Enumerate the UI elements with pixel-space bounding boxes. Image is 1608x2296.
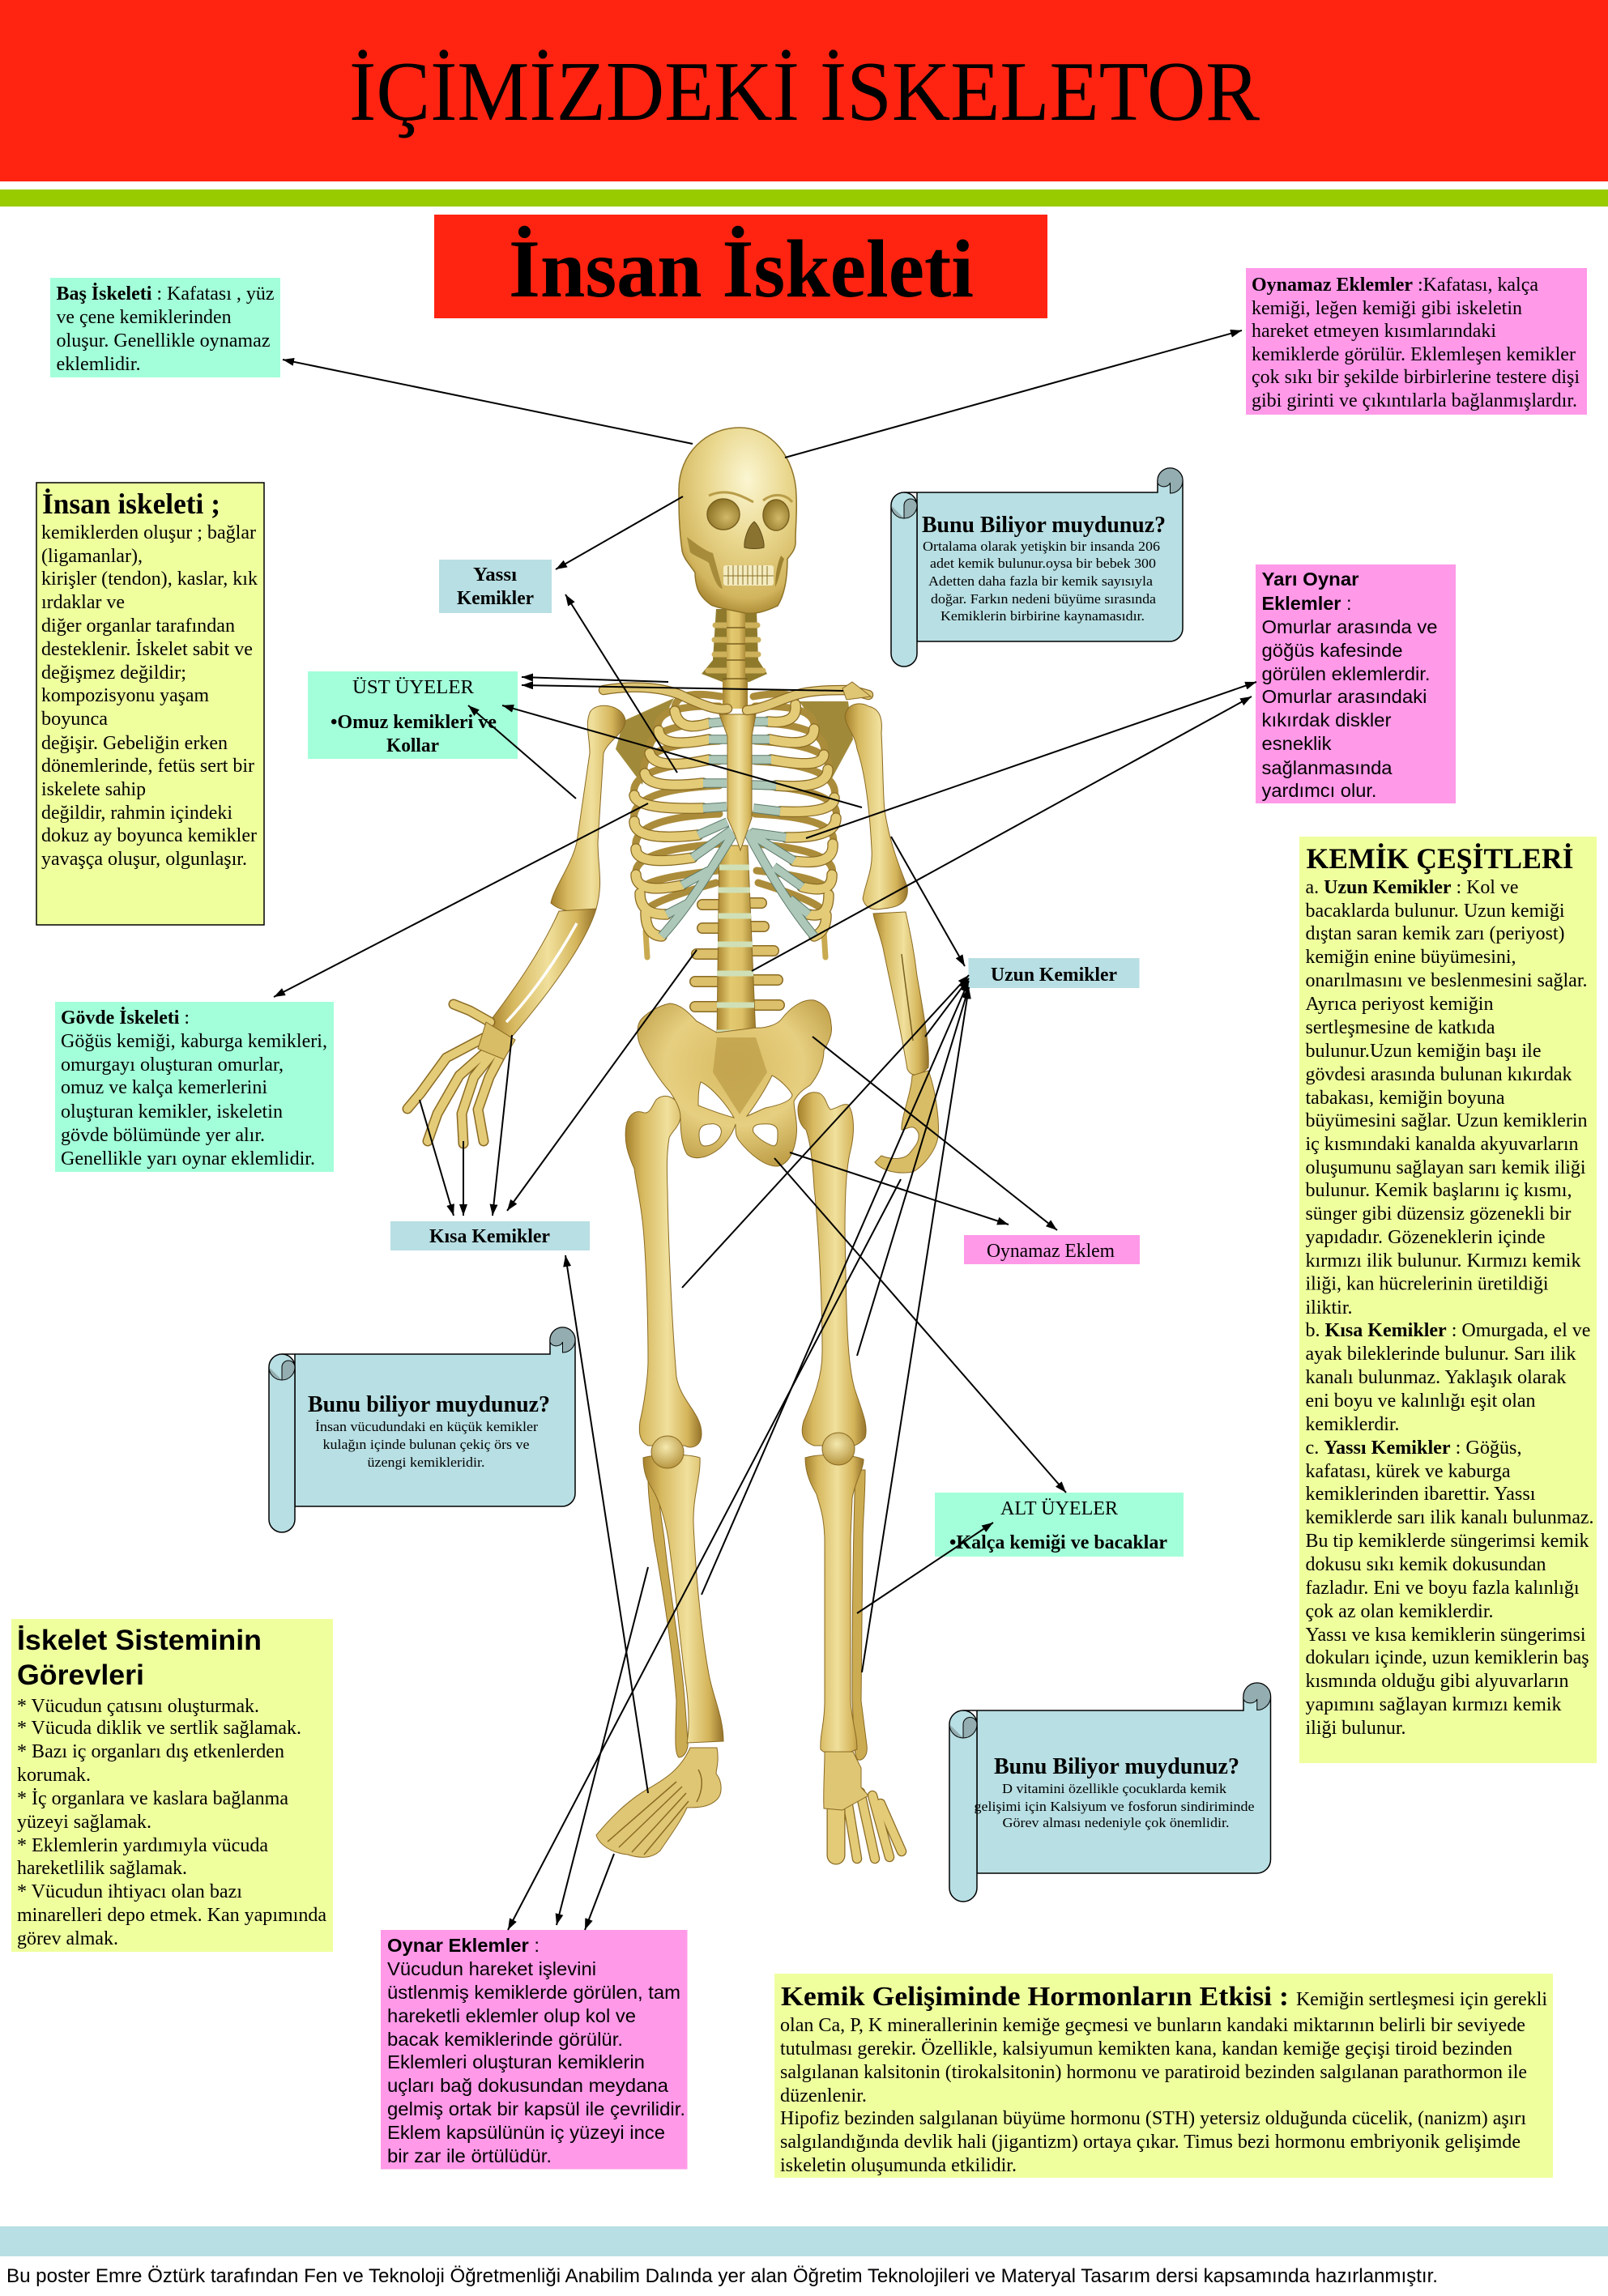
heading: Kemik Gelişiminde Hormonların Etkisi : bbox=[781, 1982, 1289, 2012]
label: oynamaz eklem bbox=[964, 1235, 1140, 1264]
skull bbox=[679, 428, 796, 613]
panel: gövde iskeleti: oluşturan kemikler, iskeletin bbox=[61, 1101, 283, 1122]
panel: bilgi kutusu 1 scroll: Ortalama olarak yetişkin bir insanda 206 bbox=[923, 539, 1160, 554]
panel: kemik çeşitleri: iliği, kan hücrelerinin üretildiği bbox=[1306, 1273, 1549, 1294]
left femur bbox=[625, 1096, 702, 1447]
panel: insan iskeleti: yavaşça oluşur, olgunlaşır. bbox=[41, 849, 247, 870]
panel: oynamaz eklemler: kemiği, leğen kemiği gibi iskeletin bbox=[1252, 298, 1522, 319]
panel: insan iskeleti: desteklenir. İskelet sabit ve bbox=[41, 639, 253, 660]
panel: kemik çeşitleri: dokusu sıkı kemik dokusundan bbox=[1306, 1554, 1546, 1575]
panel: bilgi kutusu 1 scroll: adet kemik bulunur.oysa bir bebek 300 bbox=[930, 556, 1156, 571]
panel: kemik çeşitleri: büyümesini sağlar. Uzun kemiklerin bbox=[1306, 1110, 1588, 1131]
arrow: foot to oynar eklemler bbox=[585, 1854, 614, 1930]
heading: İskelet Sisteminin bbox=[17, 1625, 262, 1656]
panel: gövde iskeleti: gövde bölümünde yer alır. bbox=[61, 1125, 265, 1146]
panel: gövde iskeleti: omuz ve kalça kemerlerini bbox=[61, 1077, 267, 1098]
green divider band bbox=[0, 190, 1608, 207]
panel: yarı oynar eklemler: Omurlar arasında ve bbox=[1262, 616, 1437, 637]
panel: kemik gelişiminde hormonların etkisi: düzenlenir. bbox=[780, 2085, 867, 2106]
right lower leg bbox=[805, 1433, 867, 1760]
arrow: fibula to alt üyeler bbox=[857, 1523, 993, 1613]
panel: kemik çeşitleri: Yassı ve kısa kemiklerin süngerimsi bbox=[1306, 1625, 1586, 1646]
panel: bilgi kutusu 1 scroll bbox=[891, 468, 1183, 667]
panel: insan iskeleti: (ligamanlar), bbox=[41, 546, 143, 567]
panel: oynamaz eklemler: hareket etmeyen kısımlarındaki bbox=[1252, 321, 1496, 342]
panel: insan iskeleti: kirişler (tendon), kaslar, kık bbox=[41, 569, 258, 590]
panel: bilgi kutusu 3 scroll: Bunu Biliyor muydunuz? bbox=[994, 1754, 1239, 1779]
panel: bilgi kutusu 3 scroll: D vitamini özellikle çocuklarda kemik bbox=[1002, 1781, 1227, 1796]
panel: insan iskeleti: ırdaklar ve bbox=[41, 592, 125, 613]
panel: kemik çeşitleri: iliği bulunur. bbox=[1306, 1718, 1406, 1739]
right arm bbox=[845, 704, 928, 1075]
panel: bilgi kutusu 3 scroll: gelişimi için Kalsiyum ve fosforun sindiriminde bbox=[974, 1799, 1254, 1814]
panel: yarı oynar eklemler: esneklik bbox=[1262, 733, 1332, 754]
panel: bilgi kutusu 2 scroll: kulağın içinde bulunan çekiç örs ve bbox=[322, 1437, 530, 1452]
label: alt üyeler: •Kalça kemiği ve bacaklar bbox=[949, 1532, 1167, 1553]
panel: baş iskeleti: Baş İskeleti : Kafatası , yüz bbox=[57, 283, 274, 305]
left foot bbox=[596, 1748, 721, 1857]
panel: oynamaz eklemler: kemiklerde görülür. Eklemleşen kemikler bbox=[1252, 344, 1576, 365]
arrow: forearm to uzun kemikler bbox=[925, 978, 969, 1037]
panel: bilgi kutusu 1 scroll: Bunu Biliyor muydunuz? bbox=[922, 513, 1166, 538]
skeleton illustration bbox=[407, 428, 938, 1859]
label: oynamaz eklem: Oynamaz Eklem bbox=[987, 1241, 1115, 1262]
footer credit: Bu poster Emre Öztürk tarafından Fen ve Teknoloji Öğretmenliği Anabilim Dalında yer alan Öğretim Teknolojileri ve Materyal Tasarım dersi kapsamında hazırlanmıştır. bbox=[6, 2265, 1438, 2287]
panel: insan iskeleti: boyunca bbox=[41, 709, 108, 730]
panel: kemik gelişiminde hormonların etkisi: Kemiğin sertleşmesi için gerekli bbox=[1296, 1989, 1547, 2010]
subtitle: İnsan İskeleti bbox=[509, 224, 974, 315]
right foot bbox=[824, 1752, 902, 1859]
panel: kemik çeşitleri: kemiklerinden ibarettir. Yassı bbox=[1306, 1484, 1536, 1505]
panel: iskelet sisteminin görevleri: hareketlilik sağlamak. bbox=[17, 1858, 187, 1879]
arrow: right clavicle to üst üyeler bbox=[522, 685, 843, 691]
lumbar spine bbox=[695, 846, 779, 1037]
panel: insan iskeleti: iskelete sahip bbox=[41, 779, 146, 800]
right hand bbox=[875, 1071, 938, 1173]
panel: kemik çeşitleri: c. Yassı Kemikler : Göğüs, bbox=[1306, 1438, 1521, 1459]
panel: iskelet sisteminin görevleri: * Vücudun çatısını oluşturmak. bbox=[17, 1696, 259, 1717]
arrow: humerus to uzun kemikler bbox=[891, 837, 965, 966]
panel: bilgi kutusu 1 scroll: Kemiklerin birbirine kaynamasıdır. bbox=[940, 608, 1145, 624]
arrow: shin to oynar eklemler bbox=[557, 1567, 648, 1925]
panel: kemik gelişiminde hormonların etkisi: olan Ca, P, K minerallerinin kemiğe geçmesi ve bunların kandaki miktarının belirli bir seviyede bbox=[780, 2015, 1525, 2036]
panel: yarı oynar eklemler: yardımcı olur. bbox=[1262, 780, 1377, 801]
arrow: hand to oynar eklemler bbox=[508, 1179, 901, 1930]
arrow: wrist to kısa kemikler bbox=[493, 1035, 512, 1216]
panel: bilgi kutusu 3 scroll: Görev alması nedeniyle çok önemlidir. bbox=[1003, 1815, 1230, 1830]
panel: gövde iskeleti: Göğüs kemiği, kaburga kemikleri, bbox=[61, 1031, 327, 1052]
panel: oynar eklemler: uçları bağ dokusundan meydana bbox=[387, 2075, 668, 2096]
panel: kemik çeşitleri: kısmında olduğu gibi alyuvarların bbox=[1306, 1671, 1568, 1692]
panel: insan iskeleti: kompozisyonu yaşam bbox=[41, 685, 209, 706]
panel: kemik çeşitleri: ayak bileklerinde bulunur. Sarı ilik bbox=[1306, 1344, 1576, 1365]
panel: insan iskeleti: diğer organlar tarafından bbox=[41, 616, 235, 637]
title banner bbox=[0, 0, 1608, 181]
panel: kemik çeşitleri: kırmızı ilik bulunur. Kırmızı kemik bbox=[1306, 1250, 1581, 1272]
panel: oynar eklemler: üstlenmiş kemiklerde görülen, tam bbox=[387, 1982, 680, 2003]
panel: kemik çeşitleri: bulunur. Kemik başlarını iç kısmı, bbox=[1306, 1180, 1572, 1201]
arrow: spine to yarı oynar bbox=[752, 696, 1252, 971]
panel: oynar eklemler: Oynar Eklemler : bbox=[387, 1935, 540, 1956]
panel: bilgi kutusu 2 scroll bbox=[269, 1327, 575, 1532]
panel: kemik çeşitleri: Bu tip kemiklerde süngerimsi kemik bbox=[1306, 1531, 1589, 1552]
arrow: finger 2 to kısa kemikler bbox=[463, 1141, 464, 1216]
panel: kemik çeşitleri: onarılmasını ve beslenmesini sağlar. bbox=[1306, 970, 1588, 991]
panel: gövde iskeleti: Gövde İskeleti : bbox=[61, 1007, 190, 1029]
label: alt üyeler: ALT ÜYELER bbox=[1000, 1498, 1118, 1519]
panel: kemik çeşitleri: iliktir. bbox=[1306, 1297, 1353, 1318]
arrow: skull to yassı kemikler bbox=[556, 496, 683, 569]
panel: kemik çeşitleri: yapıdadır. Gözeneklerin içinde bbox=[1306, 1227, 1546, 1248]
panel: insan iskeleti: dönemlerinde, fetüs sert bir bbox=[41, 756, 254, 777]
label: yassı kemikler bbox=[439, 560, 552, 613]
panel: kemik gelişiminde hormonların etkisi: salgılanan kalsitonin (tirokalsitonin) hormonu ve paratiroid bezinden salgılanan parathormon ile bbox=[780, 2062, 1527, 2083]
panel: kemik gelişiminde hormonların etkisi: Hipofiz bezinden salgılanan büyüme hormonu (STH) yetersiz olduğunda cücelik, (nanizm) aşırı bbox=[780, 2108, 1526, 2129]
arrow: ribs to gövde iskeleti bbox=[274, 803, 648, 997]
panel: baş iskeleti bbox=[50, 278, 280, 377]
heading: KEMİK ÇEŞİTLERİ bbox=[1306, 842, 1573, 875]
neck vertebrae bbox=[702, 607, 767, 709]
panel: insan iskeleti: değişmez değildir; bbox=[41, 662, 186, 684]
panel: kemik çeşitleri bbox=[1299, 837, 1597, 1763]
panel: oynamaz eklemler: Oynamaz Eklemler :Kafatası, kalça bbox=[1252, 275, 1538, 296]
panel: yarı oynar eklemler: Omurlar arasındaki bbox=[1262, 686, 1427, 707]
panel: iskelet sisteminin görevleri: * Vücudun ihtiyacı olan bazı bbox=[17, 1881, 242, 1902]
panel: kemik çeşitleri: çok az olan kemiklerdir. bbox=[1306, 1601, 1494, 1622]
panel: kemik gelişiminde hormonların etkisi: salgılandığında devlik hali (jigantizm) ortaya çıkar. Timus bezi hormonu embriyonik gelişimde bbox=[780, 2132, 1521, 2153]
panel: oynamaz eklemler bbox=[1246, 268, 1587, 415]
label: üst üyeler: •Omuz kemikleri ve bbox=[331, 712, 497, 733]
panel: iskelet sisteminin görevleri: * Eklemlerin yardımıyla vücuda bbox=[17, 1835, 268, 1856]
clavicles bbox=[604, 682, 871, 710]
panel: oynar eklemler: bacak kemiklerinde görülür. bbox=[387, 2029, 623, 2050]
panel: oynar eklemler: Vücudun hareket işlevini bbox=[387, 1958, 596, 1979]
back ribs bbox=[633, 694, 837, 957]
label: yassı kemikler: Kemikler bbox=[457, 588, 534, 609]
arrow: pelvis to alt üyeler bbox=[774, 1158, 1066, 1493]
arrow: right femur to uzun kemikler bbox=[857, 987, 969, 1356]
panel: kemik çeşitleri: a. Uzun Kemikler : Kol ve bbox=[1306, 877, 1518, 898]
panel: insan iskeleti: değildir, rahmin içindeki bbox=[41, 803, 232, 824]
panel: iskelet sisteminin görevleri: Görevleri bbox=[17, 1659, 144, 1691]
arrow: skull to baş iskeleti bbox=[283, 360, 693, 444]
panel: kemik çeşitleri: yapımını sağlayan kırmızı kemik bbox=[1306, 1694, 1562, 1715]
panel: kemik çeşitleri: gövdesi arasında bulunan kıkırdak bbox=[1306, 1064, 1572, 1085]
panel: gövde iskeleti: omurgayı oluşturan omurlar, bbox=[61, 1054, 284, 1076]
panel: kemik çeşitleri: kemiklerdir. bbox=[1306, 1414, 1400, 1435]
subtitle panel bbox=[434, 215, 1047, 318]
panel: kemik çeşitleri: tabakası, kemiğin boyuna bbox=[1306, 1088, 1505, 1109]
right femur bbox=[798, 1093, 866, 1446]
pelvis bbox=[638, 1000, 832, 1166]
footer band bbox=[0, 2226, 1608, 2256]
panel: insan iskeleti: dokuz ay boyunca kemikler bbox=[41, 825, 257, 846]
panel: kemik çeşitleri: Ayrıca periyost kemiğin bbox=[1306, 994, 1494, 1015]
panel: bilgi kutusu 1 scroll: doğar. Farkın nedeni büyüme sırasında bbox=[931, 591, 1156, 607]
panel: iskelet sisteminin görevleri: görev almak. bbox=[17, 1928, 118, 1949]
sternum bbox=[719, 714, 756, 850]
panel: baş iskeleti: oluşur. Genellikle oynamaz bbox=[57, 330, 271, 351]
panel: insan iskeleti: kemiklerden oluşur ; bağlar bbox=[41, 522, 256, 543]
heading: İnsan iskeleti ; bbox=[42, 488, 220, 520]
panel: kemik çeşitleri: bulunur.Uzun kemiğin başı ile bbox=[1306, 1041, 1541, 1062]
panel: bilgi kutusu 3 scroll bbox=[949, 1683, 1270, 1902]
panel: gövde iskeleti: Genellikle yarı oynar eklemlidir. bbox=[61, 1148, 315, 1169]
label: üst üyeler bbox=[308, 671, 518, 759]
arrow: right humerus to üst üyeler bbox=[502, 705, 862, 807]
front ribs and cartilage bbox=[634, 705, 836, 936]
label: üst üyeler: ÜST ÜYELER bbox=[352, 677, 474, 698]
panel: yarı oynar eklemler: Yarı Oynar bbox=[1262, 569, 1359, 590]
panel: oynar eklemler: gelmiş ortak bir kapsül ile çevrilidir. bbox=[387, 2098, 685, 2119]
panel: kemik çeşitleri: bacaklarda bulunur. Uzun kemiği bbox=[1306, 901, 1565, 922]
arrow: left femur to uzun kemikler bbox=[682, 975, 969, 1288]
label: alt üyeler bbox=[935, 1493, 1184, 1557]
arrow: foot to kısa kemikler bbox=[565, 1255, 648, 1793]
panel: oynamaz eklemler: çok sıkı bir şekilde birbirlerine testere dişi bbox=[1252, 367, 1580, 388]
panel: yarı oynar eklemler: sağlanmasında bbox=[1262, 757, 1393, 778]
arrow: rib joint to yarı oynar bbox=[806, 682, 1256, 838]
panel: iskelet sisteminin görevleri bbox=[11, 1619, 333, 1952]
panel: oynar eklemler: bir zar ile örtülüdür. bbox=[387, 2145, 552, 2166]
arrow: left tibia to uzun kemikler bbox=[702, 981, 969, 1595]
panel: kemik çeşitleri: iç kısmındaki kanalda akyuvarların bbox=[1306, 1134, 1578, 1155]
panel: iskelet sisteminin görevleri: * Bazı iç organları dış etkenlerden bbox=[17, 1741, 284, 1762]
arrow: finger to kısa kemikler bbox=[420, 1100, 454, 1216]
label: uzun kemikler: Uzun Kemikler bbox=[991, 965, 1117, 986]
arrows bbox=[274, 330, 1256, 1930]
arrow: spine to kısa kemikler bbox=[507, 950, 697, 1211]
arrow: pubis to oynamaz eklem bbox=[790, 1152, 1009, 1225]
arrow: pelvis to oynamaz eklem bbox=[813, 1037, 1057, 1230]
title: İÇİMİZDEKİ İSKELETOR bbox=[349, 44, 1260, 138]
panel: yarı oynar eklemler: kıkırdak diskler bbox=[1262, 709, 1392, 731]
panel: yarı oynar eklemler: göğüs kafesinde bbox=[1262, 640, 1403, 661]
panel: bilgi kutusu 2 scroll: İnsan vücudundaki en küçük kemikler bbox=[315, 1419, 538, 1434]
panel: kemik çeşitleri: sertleşmesine de katkıda bbox=[1306, 1017, 1495, 1038]
panel: kemik çeşitleri: kemiklerde sarı ilik kanalı bulunmaz. bbox=[1306, 1507, 1594, 1528]
panel: kemik çeşitleri: oluşumunu sağlayan sarı kemik iliği bbox=[1306, 1157, 1586, 1178]
arrow: rib to yassı kemikler bbox=[565, 594, 677, 773]
panel: yarı oynar eklemler bbox=[1256, 564, 1456, 803]
panel: iskelet sisteminin görevleri: minarelleri depo etmek. Kan yapımında bbox=[17, 1905, 326, 1926]
left hand bbox=[407, 1004, 515, 1144]
arrow: skull to oynamaz eklemler bbox=[785, 330, 1242, 458]
panel: iskelet sisteminin görevleri: * Vücuda diklik ve sertlik sağlamak. bbox=[17, 1718, 301, 1739]
panel: kemik çeşitleri: sünger gibi düzensiz gözenekli bir bbox=[1306, 1203, 1572, 1225]
arrow: clavicle to üst üyeler bbox=[522, 677, 668, 682]
panel: iskelet sisteminin görevleri: yüzeyi sağlamak. bbox=[17, 1812, 151, 1833]
panel: bilgi kutusu 2 scroll: üzengi kemikleridir. bbox=[368, 1455, 484, 1470]
left lower leg bbox=[643, 1436, 723, 1757]
left arm bbox=[489, 705, 625, 1037]
panel: insan iskeleti bbox=[36, 483, 264, 925]
panel: kemik çeşitleri: b. Kısa Kemikler : Omurgada, el ve bbox=[1306, 1320, 1591, 1341]
panel: yarı oynar eklemler: görülen eklemlerdir. bbox=[1262, 663, 1431, 684]
label: yassı kemikler: Yassı bbox=[473, 564, 517, 586]
panel: baş iskeleti: eklemlidir. bbox=[57, 354, 141, 375]
sacrum bbox=[713, 1037, 767, 1114]
panel: bilgi kutusu 1 scroll: Adetten daha fazla bir kemik sayısıyla bbox=[928, 573, 1153, 589]
panel: kemik çeşitleri: kafatası, kürek ve kaburga bbox=[1306, 1461, 1511, 1482]
panel: oynar eklemler bbox=[381, 1930, 687, 2169]
panel: kemik çeşitleri: kanalı bulunmaz. Yaklaşık olarak bbox=[1306, 1367, 1567, 1388]
panel: kemik çeşitleri: dokuları içinde, uzun kemiklerin baş bbox=[1306, 1647, 1589, 1668]
panel: yarı oynar eklemler: Eklemler : bbox=[1262, 593, 1351, 614]
arrow: right fibula to uzun kemikler bbox=[862, 987, 969, 1672]
panel: iskelet sisteminin görevleri: * İç organlara ve kaslara bağlanma bbox=[17, 1788, 288, 1809]
panel: bilgi kutusu 2 scroll: Bunu biliyor muydunuz? bbox=[308, 1392, 550, 1417]
panel: insan iskeleti: değişir. Gebeliğin erken bbox=[41, 733, 228, 754]
panel: oynar eklemler: Eklemleri oluşturan kemiklerin bbox=[387, 2051, 645, 2072]
panel: kemik çeşitleri: eni boyu ve kalınlığı eşit olan bbox=[1306, 1391, 1536, 1412]
panel: gövde iskeleti bbox=[55, 1002, 334, 1172]
label: kısa kemikler bbox=[390, 1221, 590, 1250]
panel: iskelet sisteminin görevleri: korumak. bbox=[17, 1765, 91, 1786]
panel: oynar eklemler: Eklem kapsülünün iç yüzeyi ince bbox=[387, 2122, 665, 2143]
label: üst üyeler: Kollar bbox=[386, 735, 439, 756]
panel: kemik gelişiminde hormonların etkisi: iskeletin oluşumunda etkilidir. bbox=[780, 2155, 1017, 2176]
panel: kemik çeşitleri: fazladır. Eni ve boyu fazla kalınlığı bbox=[1306, 1578, 1580, 1599]
panel: kemik çeşitleri: kemiğin enine büyümesini, bbox=[1306, 947, 1516, 968]
panel: baş iskeleti: ve çene kemiklerinden bbox=[57, 307, 232, 328]
label: uzun kemikler bbox=[969, 958, 1139, 988]
scapulae bbox=[616, 698, 853, 785]
panel: oynar eklemler: hareketli eklemler olup kol ve bbox=[387, 2005, 636, 2026]
panel: kemik gelişiminde hormonların etkisi bbox=[774, 1974, 1553, 2178]
panel: kemik gelişiminde hormonların etkisi: tutulması gerekir. Özellikle, kalsiyumun kemikten kana, kandan kemiğe geçişi tiroid bezinden bbox=[780, 2038, 1512, 2060]
panel: oynamaz eklemler: gibi girinti ve çıkıntılarla bağlanmışlardır. bbox=[1252, 390, 1577, 411]
panel: kemik çeşitleri: dıştan saran kemik zarı (periyost) bbox=[1306, 923, 1565, 944]
arrow: left humerus to üst üyeler bbox=[468, 705, 576, 799]
label: kısa kemikler: Kısa Kemikler bbox=[429, 1226, 550, 1247]
